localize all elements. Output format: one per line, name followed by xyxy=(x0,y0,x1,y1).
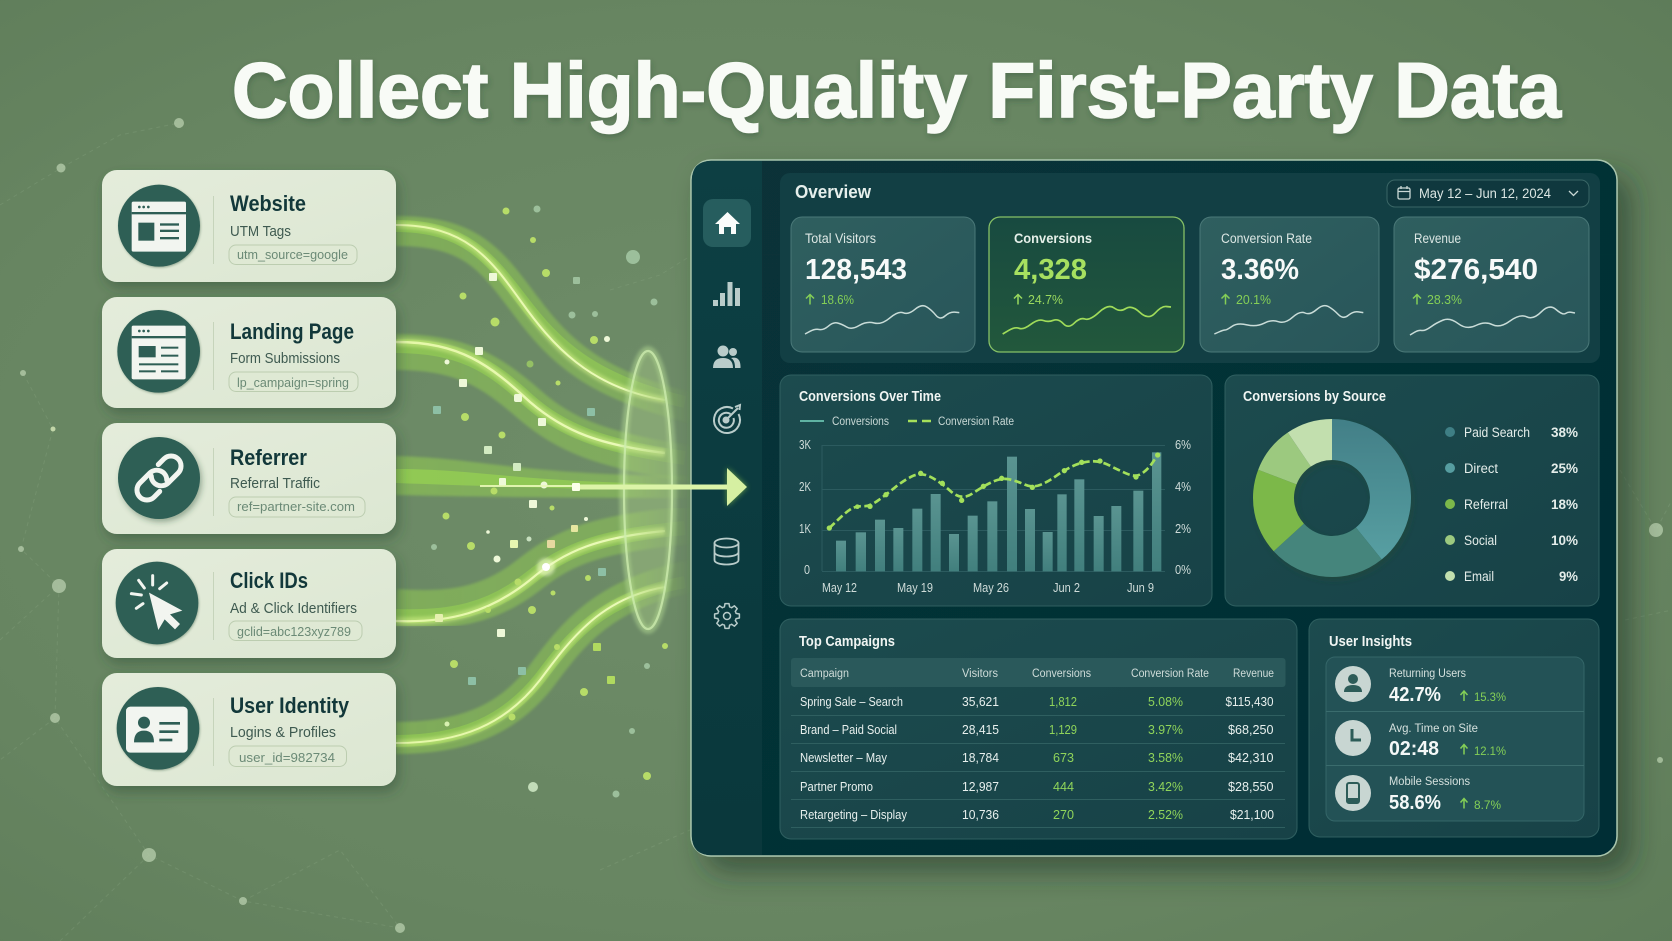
insight: mobile sessions: 58.6% xyxy=(1389,792,1441,814)
row: newsletter xyxy=(800,751,1274,765)
stat: revenue xyxy=(1394,217,1589,352)
icon: home xyxy=(703,199,751,247)
dashboard xyxy=(691,160,1617,856)
overview panel: Overview xyxy=(795,182,872,202)
donut legend: 18% xyxy=(1551,497,1578,512)
insight: returning users: Returning Users xyxy=(1389,668,1466,680)
row: newsletter: Newsletter – May xyxy=(800,751,888,765)
donut legend: 38% xyxy=(1551,425,1578,440)
donut legend: 10% xyxy=(1551,533,1578,548)
panel: top campaigns xyxy=(780,619,1297,839)
axis labels: 0% xyxy=(1175,563,1191,577)
tag: utm_source xyxy=(229,245,357,264)
row: retargeting: $21,100 xyxy=(1230,808,1274,822)
icon: users xyxy=(713,346,740,368)
axis labels: May 12 xyxy=(822,581,857,595)
row: retargeting: 270 xyxy=(1053,808,1074,822)
donut legend: Referral xyxy=(1464,497,1508,512)
chart legend: Conversions xyxy=(832,416,889,428)
card: website xyxy=(102,170,396,282)
row: brand paid social: 1,129 xyxy=(1049,723,1077,737)
card: referrer: Referrer xyxy=(230,445,307,470)
insight: mobile sessions xyxy=(1335,775,1501,814)
donut legend: Social xyxy=(1464,533,1497,548)
row: partner promo: 12,987 xyxy=(962,780,999,794)
row: brand paid social: 3.97% xyxy=(1148,723,1183,737)
stat: conversions: 4,328 xyxy=(1014,254,1087,286)
icon: click cursor xyxy=(116,562,198,644)
stat: revenue: $276,540 xyxy=(1414,254,1538,286)
stat: conversions: 24.7% xyxy=(1028,292,1063,307)
stat: total visitors: 18.6% xyxy=(821,292,854,307)
row: partner promo: Partner Promo xyxy=(800,780,873,794)
card: website: UTM Tags xyxy=(230,223,291,240)
row: newsletter: 673 xyxy=(1053,751,1074,765)
row: newsletter: 18,784 xyxy=(962,751,999,765)
stream: user identity xyxy=(396,576,692,743)
table header: Visitors xyxy=(962,668,998,680)
stat: revenue: Revenue xyxy=(1414,231,1461,246)
axis labels: May 19 xyxy=(897,581,933,595)
row: spring sale: 5.08% xyxy=(1148,695,1183,709)
donut legend: Direct xyxy=(1464,461,1498,476)
row: brand paid social: $68,250 xyxy=(1228,723,1274,737)
insight: avg time on site xyxy=(1335,720,1506,760)
chart legend xyxy=(800,416,1014,428)
stat: conversion rate: 3.36% xyxy=(1221,254,1299,286)
icon: bar chart xyxy=(713,282,740,306)
tag: gclid xyxy=(229,621,362,640)
row: partner promo: $28,550 xyxy=(1228,780,1274,794)
row: retargeting: Retargeting – Display xyxy=(800,808,908,822)
stream: landing page xyxy=(396,342,692,464)
donut legend: Paid Search xyxy=(1464,425,1530,440)
insight: returning users: 15.3% xyxy=(1474,690,1506,704)
table header xyxy=(791,658,1286,687)
panel: user insights xyxy=(1309,619,1599,837)
row: spring sale xyxy=(800,695,1274,709)
row: newsletter: 3.58% xyxy=(1148,751,1183,765)
stream: website xyxy=(396,225,692,408)
insight: returning users xyxy=(1335,666,1506,706)
insight: mobile sessions: Mobile Sessions xyxy=(1389,776,1470,788)
icon: settings gear xyxy=(715,604,739,628)
data particles xyxy=(431,206,668,798)
panel: top campaigns: Top Campaigns xyxy=(799,634,895,650)
axis labels: 3K xyxy=(799,438,812,452)
icon: database xyxy=(714,538,738,564)
table rows xyxy=(791,695,1285,828)
card: click ids xyxy=(102,549,396,658)
axis labels: 4% xyxy=(1175,480,1191,494)
donut legend: 25% xyxy=(1551,461,1578,476)
card: user identity: Logins & Profiles xyxy=(230,724,336,741)
row: partner promo: 444 xyxy=(1053,780,1074,794)
insight: avg time on site: 12.1% xyxy=(1474,744,1506,758)
insight: returning users: 42.7% xyxy=(1389,684,1441,706)
date range picker xyxy=(1387,180,1589,207)
glowing lens ellipse xyxy=(623,350,673,630)
row: partner promo xyxy=(800,780,1274,794)
central arrow into dashboard xyxy=(480,468,747,506)
overview panel xyxy=(780,173,1600,363)
row: partner promo: 3.42% xyxy=(1148,780,1183,794)
axis labels: 2K xyxy=(799,480,812,494)
stat: total visitors: 128,543 xyxy=(805,254,907,286)
row: brand paid social: Brand – Paid Social xyxy=(800,723,897,737)
conversion rate line xyxy=(827,452,1160,531)
card: landing page: Form Submissions xyxy=(230,350,340,367)
axis labels: 6% xyxy=(1175,438,1191,452)
tag: utm_source: utm_source=google xyxy=(237,248,348,262)
row: spring sale: 1,812 xyxy=(1049,695,1077,709)
card: landing page: Landing Page xyxy=(230,319,354,344)
title: Collect High-Quality First-Party Data xyxy=(232,46,1562,134)
donut chart xyxy=(1253,419,1411,577)
stat: revenue: 28.3% xyxy=(1427,292,1462,307)
axis labels: 1K xyxy=(799,522,812,536)
stat: total visitors: Total Visitors xyxy=(805,231,876,246)
data streams flowing to dashboard xyxy=(396,225,692,743)
stat: conversions: Conversions xyxy=(1014,231,1092,246)
tag: ref xyxy=(229,497,365,517)
row: brand paid social: 28,415 xyxy=(962,723,999,737)
row: retargeting xyxy=(800,808,1274,822)
donut legend: 9% xyxy=(1559,569,1578,584)
tag: ref: ref=partner-site.com xyxy=(237,500,355,514)
sidebar xyxy=(692,161,762,855)
card: user identity: User Identity xyxy=(230,693,350,718)
card: referrer: Referral Traffic xyxy=(230,475,320,492)
table header: Revenue xyxy=(1233,668,1274,680)
insight: mobile sessions: 8.7% xyxy=(1474,798,1501,812)
panel: conversions over time xyxy=(780,375,1212,606)
stat: conversion rate: 20.1% xyxy=(1236,292,1271,307)
donut legend xyxy=(1445,425,1578,584)
panel: conversions by source xyxy=(1225,375,1599,606)
stat: conversions xyxy=(989,217,1184,352)
icon: landing page window xyxy=(117,310,200,393)
axis labels: Jun 2 xyxy=(1053,581,1080,595)
row: spring sale: 35,621 xyxy=(962,695,999,709)
combo chart xyxy=(799,438,1191,595)
tag: lp_campaign: lp_campaign=spring xyxy=(237,376,349,390)
panel: conversions by source: Conversions by Source xyxy=(1243,389,1386,405)
table header: Campaign xyxy=(800,668,849,680)
tag: user_id: user_id=982734 xyxy=(239,751,335,765)
stream: referrer xyxy=(396,456,692,498)
panel: user insights: User Insights xyxy=(1329,634,1412,650)
icon: id card xyxy=(117,687,199,770)
axis labels: Jun 9 xyxy=(1127,581,1154,595)
card: click ids: Ad & Click Identifiers xyxy=(230,600,357,617)
stream: click ids xyxy=(396,525,692,621)
card: user identity xyxy=(102,673,396,786)
card: website: Website xyxy=(230,191,306,216)
card: landing page xyxy=(102,297,396,408)
panel: conversions over time: Conversions Over Time xyxy=(799,389,941,405)
stat: total visitors xyxy=(791,217,975,352)
tag: gclid: gclid=abc123xyz789 xyxy=(237,625,351,639)
icon: website window xyxy=(118,185,200,267)
conversions bars xyxy=(836,452,1161,571)
icon: target xyxy=(714,405,740,433)
source cards xyxy=(102,170,396,786)
row: brand paid social xyxy=(800,723,1274,737)
axis labels: 0 xyxy=(804,563,810,577)
tag: lp_campaign xyxy=(229,372,358,392)
insight: avg time on site: 02:48 xyxy=(1389,738,1439,760)
table header: Conversion Rate xyxy=(1131,668,1209,680)
date range picker: May 12 – Jun 12, 2024 xyxy=(1419,186,1551,201)
chart legend: Conversion Rate xyxy=(938,416,1014,428)
stat: conversion rate xyxy=(1200,217,1379,352)
card: click ids: Click IDs xyxy=(230,568,308,593)
row: retargeting: 2.52% xyxy=(1148,808,1183,822)
stat: conversion rate: Conversion Rate xyxy=(1221,231,1312,246)
row: spring sale: $115,430 xyxy=(1226,695,1274,709)
axis labels: May 26 xyxy=(973,581,1009,595)
row: retargeting: 10,736 xyxy=(962,808,999,822)
axis labels: 2% xyxy=(1175,522,1191,536)
donut legend: Email xyxy=(1464,569,1494,584)
card: referrer xyxy=(102,423,396,534)
tag: user_id xyxy=(229,746,346,766)
row: newsletter: $42,310 xyxy=(1228,751,1274,765)
axis labels xyxy=(799,438,1191,595)
insight: avg time on site: Avg. Time on Site xyxy=(1389,723,1478,735)
table header: Conversions xyxy=(1032,668,1091,680)
icon: chain link xyxy=(118,437,200,519)
row: spring sale: Spring Sale – Search xyxy=(800,695,903,709)
